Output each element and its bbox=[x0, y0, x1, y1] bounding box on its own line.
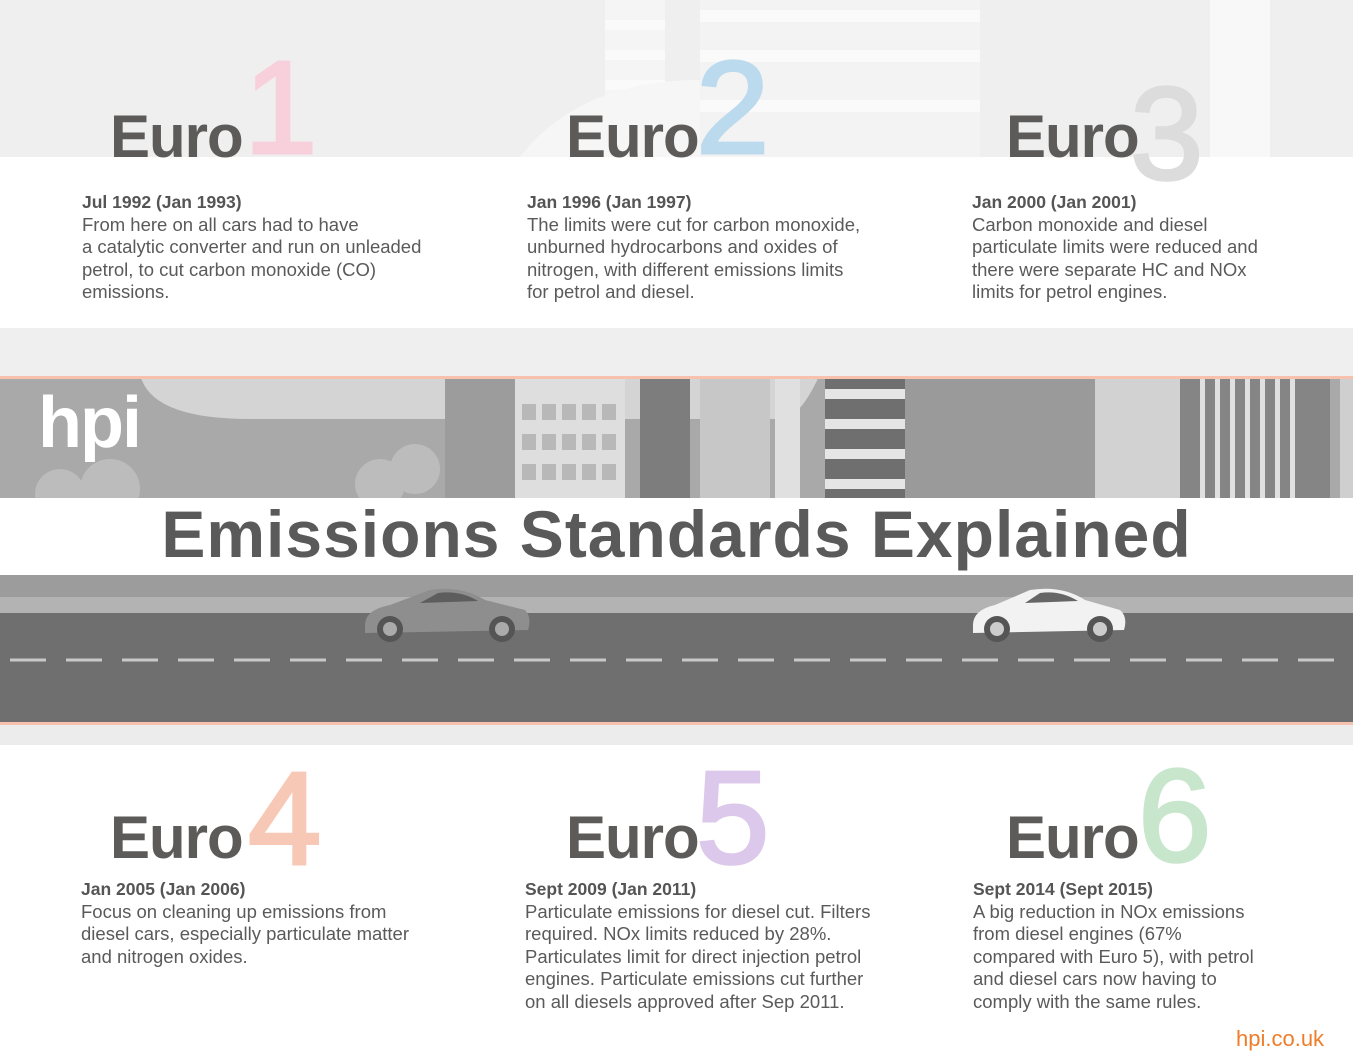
text: Euro 1 bbox=[82, 192, 421, 302]
panel: middle light band bbox=[0, 328, 1353, 376]
text: Euro 3: there were separate HC and NOx bbox=[972, 259, 1247, 280]
heading: Euro 4: 4 bbox=[248, 745, 321, 892]
logo: hpi: hpi bbox=[38, 383, 140, 463]
heading: Euro 6 bbox=[1006, 742, 1211, 889]
heading: Euro 4 bbox=[110, 745, 321, 892]
text: Euro 1: emissions. bbox=[82, 281, 169, 302]
heading: Euro 4: Euro bbox=[110, 804, 243, 871]
heading: Euro 1 bbox=[110, 34, 317, 181]
text: Euro 3: particulate limits were reduced and bbox=[972, 236, 1258, 257]
heading: Euro 3: 3 bbox=[1130, 60, 1203, 207]
text: Euro 1: Jul 1992 (Jan 1993) bbox=[82, 192, 242, 212]
car: left bbox=[365, 589, 530, 642]
heading: Euro 3 bbox=[1006, 60, 1203, 207]
text: Euro 5: Sept 2009 (Jan 2011) bbox=[525, 879, 696, 899]
text: Euro 6: and diesel cars now having to bbox=[973, 968, 1217, 989]
heading: Euro 2 bbox=[566, 34, 769, 181]
text: Euro 4: Jan 2005 (Jan 2006) bbox=[81, 879, 245, 899]
text: Euro 4 bbox=[81, 879, 409, 967]
text: Euro 6: from diesel engines (67% bbox=[973, 923, 1182, 944]
heading: Euro 6: 6 bbox=[1138, 742, 1211, 889]
text: Euro 2: Jan 1996 (Jan 1997) bbox=[527, 192, 691, 212]
heading: Euro 1: Euro bbox=[110, 103, 243, 170]
heading: Euro 2: Euro bbox=[566, 103, 699, 170]
text: Euro 6: A big reduction in NOx emissions bbox=[973, 901, 1244, 922]
text: Euro 1: From here on all cars had to have bbox=[82, 214, 359, 235]
heading: Euro 5 bbox=[566, 744, 769, 891]
text: Euro 3: limits for petrol engines. bbox=[972, 281, 1167, 302]
bottom light band bbox=[0, 725, 1353, 745]
text: Euro 5: Particulate emissions for diesel cut. Filters bbox=[525, 901, 870, 922]
text: Euro 5: engines. Particulate emissions cut further bbox=[525, 968, 863, 989]
text: Euro 5: on all diesels approved after Sep 2011. bbox=[525, 991, 845, 1012]
top background band bbox=[0, 0, 1353, 157]
heading: Euro 5: 5 bbox=[696, 744, 769, 891]
text: Euro 1: petrol, to cut carbon monoxide (CO) bbox=[82, 259, 376, 280]
sky band with city bbox=[0, 376, 1353, 498]
text: Euro 5: required. NOx limits reduced by 28%. bbox=[525, 923, 831, 944]
text: Euro 6: compared with Euro 5), with petrol bbox=[973, 946, 1254, 967]
car: right bbox=[973, 588, 1126, 642]
heading: Euro 6: Euro bbox=[1006, 804, 1139, 871]
text: Euro 5 bbox=[525, 879, 870, 1012]
text: Euro 2: for petrol and diesel. bbox=[527, 281, 695, 302]
text: Euro 1: a catalytic converter and run on unleaded bbox=[82, 236, 421, 257]
text: Euro 3 bbox=[972, 192, 1258, 302]
text: Euro 6: comply with the same rules. bbox=[973, 991, 1201, 1012]
text: Euro 5: Particulates limit for direct injection petrol bbox=[525, 946, 861, 967]
road bbox=[0, 575, 1353, 725]
text: Euro 4: Focus on cleaning up emissions from bbox=[81, 901, 386, 922]
text: Euro 2: The limits were cut for carbon monoxide, bbox=[527, 214, 860, 235]
heading: Euro 5: Euro bbox=[566, 804, 699, 871]
text: Euro 3: Carbon monoxide and diesel bbox=[972, 214, 1208, 235]
text: Euro 3: Jan 2000 (Jan 2001) bbox=[972, 192, 1136, 212]
text: Euro 4: diesel cars, especially particulate matter bbox=[81, 923, 409, 944]
heading: Euro 1: 1 bbox=[244, 34, 317, 181]
text: Euro 6: Sept 2014 (Sept 2015) bbox=[973, 879, 1153, 899]
footer url: hpi.co.uk bbox=[1236, 1026, 1324, 1051]
heading: Euro 3: Euro bbox=[1006, 103, 1139, 170]
text: Euro 2: nitrogen, with different emissions limits bbox=[527, 259, 843, 280]
heading: Euro 2: 2 bbox=[696, 34, 769, 181]
text: Euro 4: and nitrogen oxides. bbox=[81, 946, 248, 967]
text: Euro 2: unburned hydrocarbons and oxides of bbox=[527, 236, 838, 257]
text: Euro 6 bbox=[973, 879, 1254, 1012]
text: Euro 2 bbox=[527, 192, 860, 302]
title: Emissions Standards Explained bbox=[161, 497, 1192, 571]
